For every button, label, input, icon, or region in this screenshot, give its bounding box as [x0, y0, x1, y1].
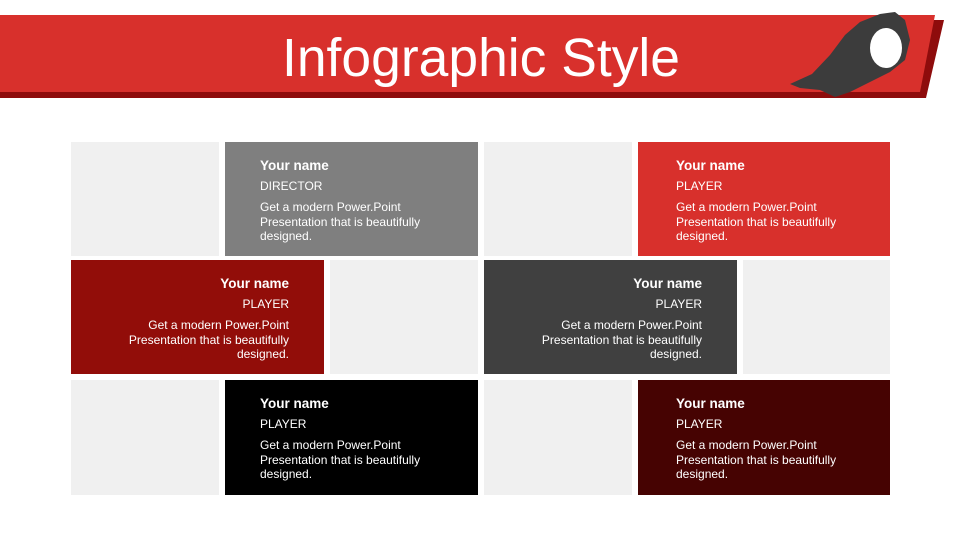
icon: brush ball: [790, 12, 910, 97]
card: player maroon: Your name: [676, 396, 745, 411]
card: player dark grey: [484, 260, 737, 374]
card: player dark red: [71, 260, 324, 374]
card: player black: [225, 380, 478, 495]
card: player black: Your name: [260, 396, 329, 411]
card: player red: [638, 142, 890, 256]
card: player black: Get a modern Power.Point Presentation that is beautifully designed.: [260, 438, 420, 481]
card: player black: PLAYER: [260, 417, 306, 431]
card: player maroon: Get a modern Power.Point Presentation that is beautifully designed.: [676, 438, 836, 481]
card: player red: Your name: [676, 158, 745, 173]
grey tiles: [71, 142, 219, 256]
card: player red: PLAYER: [676, 179, 722, 193]
card: player dark grey: Your name: [633, 276, 702, 291]
card: player dark grey: PLAYER: [656, 297, 702, 311]
title: Infographic Style: [282, 28, 680, 88]
header banner: [0, 12, 944, 98]
card: player maroon: PLAYER: [676, 417, 722, 431]
card: director: DIRECTOR: [260, 179, 322, 193]
card: director: Your name: [260, 158, 329, 173]
card: player maroon: [638, 380, 890, 495]
card: director: [225, 142, 478, 256]
card: director: Get a modern Power.Point Presentation that is beautifully designed.: [260, 200, 420, 243]
card: player dark grey: Get a modern Power.Point Presentation that is beautifully designed.: [542, 318, 702, 361]
card: player dark red: PLAYER: [243, 297, 289, 311]
card: player red: Get a modern Power.Point Presentation that is beautifully designed.: [676, 200, 836, 243]
card: player dark red: Get a modern Power.Point Presentation that is beautifully designed.: [129, 318, 289, 361]
card: player dark red: Your name: [220, 276, 289, 291]
